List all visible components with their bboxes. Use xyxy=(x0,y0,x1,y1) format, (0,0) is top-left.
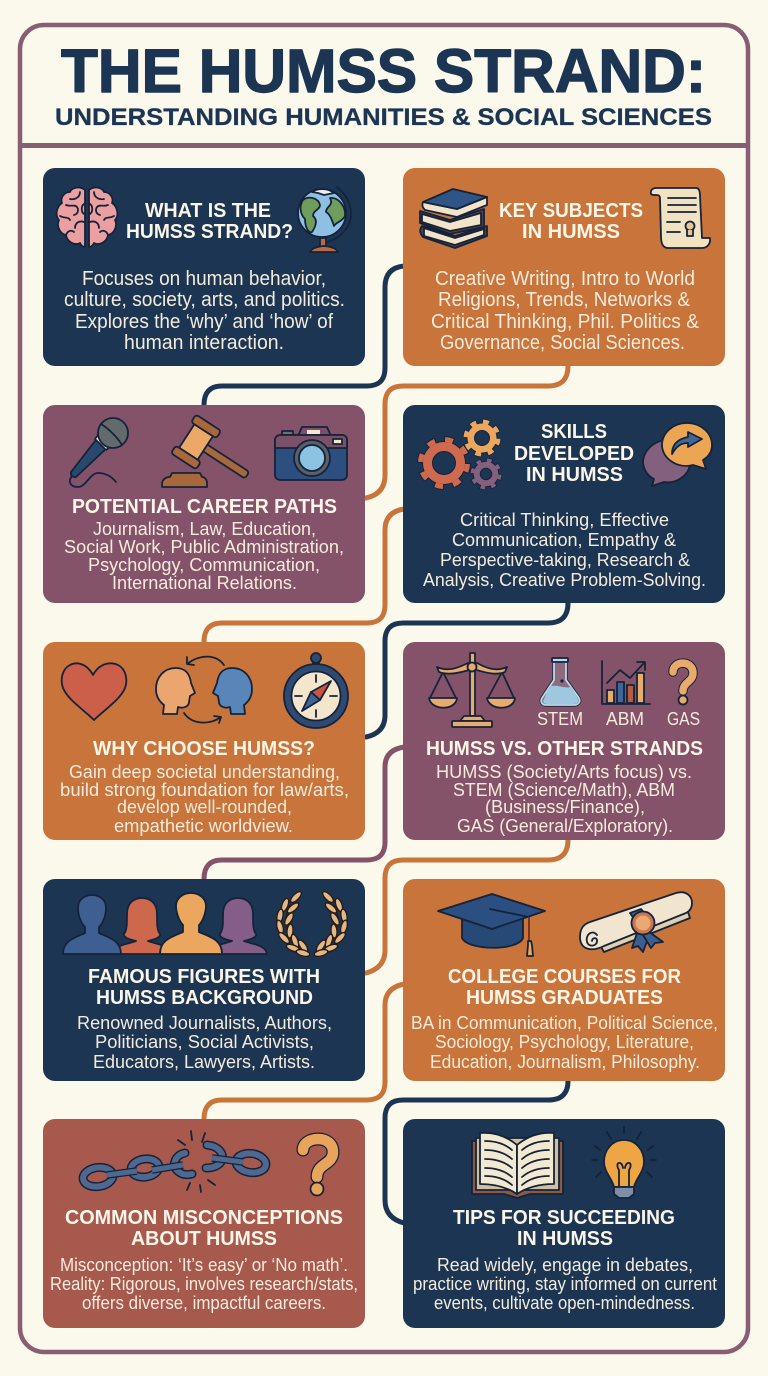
heading: IN HUMSS xyxy=(517,1228,613,1250)
body text: offers diverse, impactful careers. xyxy=(82,1293,326,1313)
body text xyxy=(64,519,344,593)
heading: FAMOUS FIGURES WITH xyxy=(88,966,320,988)
body text: Governance, Social Sciences. xyxy=(440,332,685,354)
connector: college courses to tips xyxy=(385,1081,568,1223)
icon: flask xyxy=(541,658,580,705)
body text: Gain deep societal understanding, xyxy=(69,762,340,782)
heading: DEVELOPED xyxy=(514,443,634,465)
icon: gavel xyxy=(162,415,260,495)
heading: COMMON MISCONCEPTIONS xyxy=(65,1207,343,1229)
icon: bar chart xyxy=(602,661,650,704)
body text: culture, society, arts, and politics. xyxy=(64,289,345,311)
body text: Social Work, Public Administration, xyxy=(64,537,344,557)
heading xyxy=(126,200,293,243)
heading: HUMSS BACKGROUND xyxy=(96,987,313,1009)
body text xyxy=(64,268,345,354)
body text: Read widely, engage in debates, xyxy=(437,1255,693,1275)
icon: compass xyxy=(284,653,348,728)
panel: common misconceptions xyxy=(43,1119,365,1328)
heading: ABOUT HUMSS xyxy=(131,1228,277,1250)
heading xyxy=(65,1207,343,1250)
heading xyxy=(448,966,682,1009)
body text: Analysis, Creative Problem-Solving. xyxy=(423,570,706,590)
heading: HUMSS VS. OTHER STRANDS xyxy=(426,738,703,760)
icon: graduation cap xyxy=(438,894,545,956)
heading: HUMSS STRAND? xyxy=(126,221,293,243)
body text xyxy=(436,762,692,836)
heading: IN HUMSS xyxy=(522,221,620,243)
connector: skills to why choose navy xyxy=(366,603,568,737)
body text: events, cultivate open-mindedness. xyxy=(434,1293,695,1313)
body text xyxy=(413,1255,717,1313)
panel: famous figures xyxy=(43,879,365,1081)
icon: balance scale xyxy=(429,653,515,727)
body text xyxy=(50,1255,358,1313)
icon: question mark xyxy=(303,1139,333,1196)
icon: scroll certificate xyxy=(651,188,710,248)
connector: key subjects to career paths xyxy=(204,266,404,405)
body text: Education, Journalism, Philosophy. xyxy=(430,1052,700,1072)
body text: Creative Writing, Intro to World xyxy=(435,268,695,290)
body text: Reality: Rigorous, involves research/stats, xyxy=(50,1274,358,1294)
body text: Religions, Trends, Networks & xyxy=(438,289,691,311)
body text: build strong foundation for law/arts, xyxy=(60,780,349,800)
connector: skills to why choose xyxy=(204,509,404,642)
icon: microphone xyxy=(70,418,128,487)
strand labels xyxy=(537,709,700,729)
body text xyxy=(431,268,700,354)
connector: strands to famous figures xyxy=(204,747,404,879)
connector: strands to famous figures orange xyxy=(366,840,568,973)
icon: silhouettes xyxy=(63,893,267,954)
body text: Psychology, Communication, xyxy=(88,555,320,575)
body text xyxy=(411,1013,718,1072)
body text: Focuses on human behavior, xyxy=(82,268,326,290)
body text: International Relations. xyxy=(112,573,297,593)
icon: brain xyxy=(57,188,117,247)
icon: broken chain xyxy=(82,1131,267,1192)
icon: globe xyxy=(298,187,351,252)
subtitle: UNDERSTANDING HUMANITIES & SOCIAL SCIENCES xyxy=(55,104,712,131)
body text: (Business/Finance), xyxy=(485,797,645,817)
panel: tips for succeeding xyxy=(403,1119,725,1328)
body text: GAS (General/Exploratory). xyxy=(457,816,673,836)
heading xyxy=(88,966,320,1009)
body text: Misconception: ‘It’s easy’ or ‘No math’. xyxy=(60,1255,348,1275)
body text: develop well-rounded, xyxy=(117,797,292,817)
icon: laurel wreath xyxy=(275,890,349,958)
heading: SKILLS xyxy=(541,421,607,443)
panel: why choose humss xyxy=(43,642,365,840)
panel: skills developed xyxy=(403,405,725,603)
icon: gears xyxy=(420,422,500,488)
icon: light bulb xyxy=(592,1127,656,1198)
body text: Educators, Lawyers, Artists. xyxy=(93,1052,315,1072)
body text: BA in Communication, Political Science, xyxy=(411,1013,718,1033)
icon: question mark xyxy=(673,663,693,704)
heading xyxy=(499,200,643,243)
body text xyxy=(423,510,706,590)
body text: Explores the ‘why’ and ‘how’ of xyxy=(75,311,333,333)
title: THE HUMSS STRAND: xyxy=(61,37,706,105)
icon: heart xyxy=(62,663,126,720)
panel: humss vs other strands xyxy=(403,642,725,840)
panel: potential career paths xyxy=(43,405,365,603)
icon: camera xyxy=(275,427,347,480)
heading: WHAT IS THE xyxy=(145,200,271,222)
strand labels: GAS xyxy=(667,709,700,729)
icon: diploma with ribbon xyxy=(580,892,692,952)
icon: two heads exchanging ideas xyxy=(156,657,252,723)
connector: key subjects down to career paths xyxy=(366,366,568,498)
body text: Politicians, Social Activists, xyxy=(95,1032,314,1052)
body text: Communication, Empathy & xyxy=(452,530,676,550)
heading: KEY SUBJECTS xyxy=(499,200,643,222)
strand labels: STEM xyxy=(537,709,583,729)
body text: Journalism, Law, Education, xyxy=(93,519,316,539)
panel: key subjects xyxy=(403,168,725,366)
body text: practice writing, stay informed on current xyxy=(413,1274,717,1294)
icon: stack of books xyxy=(420,189,487,248)
body text: Sociology, Psychology, Literature, xyxy=(435,1032,694,1052)
body text: human interaction. xyxy=(124,332,284,354)
heading: POTENTIAL CAREER PATHS xyxy=(72,496,337,518)
panel: what is the humss strand xyxy=(43,168,365,366)
heading xyxy=(514,421,634,486)
heading: HUMSS GRADUATES xyxy=(466,987,663,1009)
body text: Renowned Journalists, Authors, xyxy=(77,1013,332,1033)
icon: speech bubbles with arrow xyxy=(643,423,712,486)
body text: STEM (Science/Math), ABM xyxy=(453,780,675,800)
connector: college courses to misconceptions xyxy=(204,984,404,1119)
body text: Critical Thinking, Effective xyxy=(460,510,669,530)
heading: COLLEGE COURSES FOR xyxy=(448,966,682,988)
heading: IN HUMSS xyxy=(526,464,623,486)
body text: Critical Thinking, Phil. Politics & xyxy=(431,311,700,333)
icon: open book xyxy=(472,1133,563,1198)
heading: WHY CHOOSE HUMSS? xyxy=(93,738,315,760)
body text: HUMSS (Society/Arts focus) vs. xyxy=(436,762,692,782)
panel: college courses xyxy=(403,879,725,1081)
strand labels: ABM xyxy=(606,709,644,729)
body text xyxy=(60,762,349,836)
body text: empathetic worldview. xyxy=(114,816,293,836)
body text: Perspective-taking, Research & xyxy=(440,550,690,570)
heading xyxy=(453,1207,675,1250)
heading: TIPS FOR SUCCEEDING xyxy=(453,1207,675,1229)
body text xyxy=(77,1013,332,1072)
